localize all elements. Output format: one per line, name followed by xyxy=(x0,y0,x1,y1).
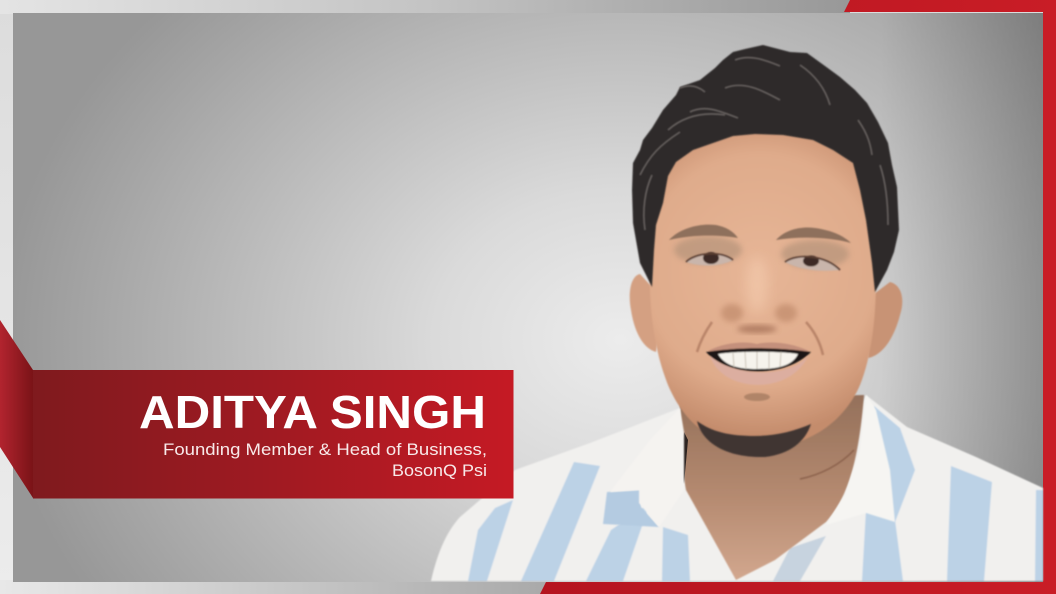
person portrait xyxy=(431,45,1043,581)
collar shadow xyxy=(680,432,688,484)
eyebrow left xyxy=(669,225,738,240)
eyebrow right xyxy=(776,228,851,243)
beard xyxy=(697,421,811,457)
eye sockets xyxy=(674,236,849,268)
red banner fold xyxy=(0,320,33,498)
shirt xyxy=(431,395,1043,581)
name banner xyxy=(33,370,514,498)
left ear xyxy=(630,274,664,352)
chin patch xyxy=(744,393,770,401)
left collar xyxy=(610,408,684,527)
eye right xyxy=(785,256,840,271)
neck crease xyxy=(800,450,854,479)
right ear xyxy=(866,282,902,358)
smile creases xyxy=(697,322,823,355)
left under-collar xyxy=(603,490,659,527)
hair xyxy=(632,45,899,292)
right collar xyxy=(826,395,895,525)
nose xyxy=(721,257,797,333)
job title: Founding Member & Head of Business, xyxy=(163,441,487,459)
shirt stripes xyxy=(468,406,1043,581)
hair highlights xyxy=(640,58,888,230)
neck xyxy=(680,395,864,580)
company: BosonQ Psi xyxy=(392,462,487,480)
eye left xyxy=(686,252,733,266)
face xyxy=(650,125,876,448)
mouth xyxy=(706,342,811,385)
name: ADITYA SINGH xyxy=(139,386,486,438)
